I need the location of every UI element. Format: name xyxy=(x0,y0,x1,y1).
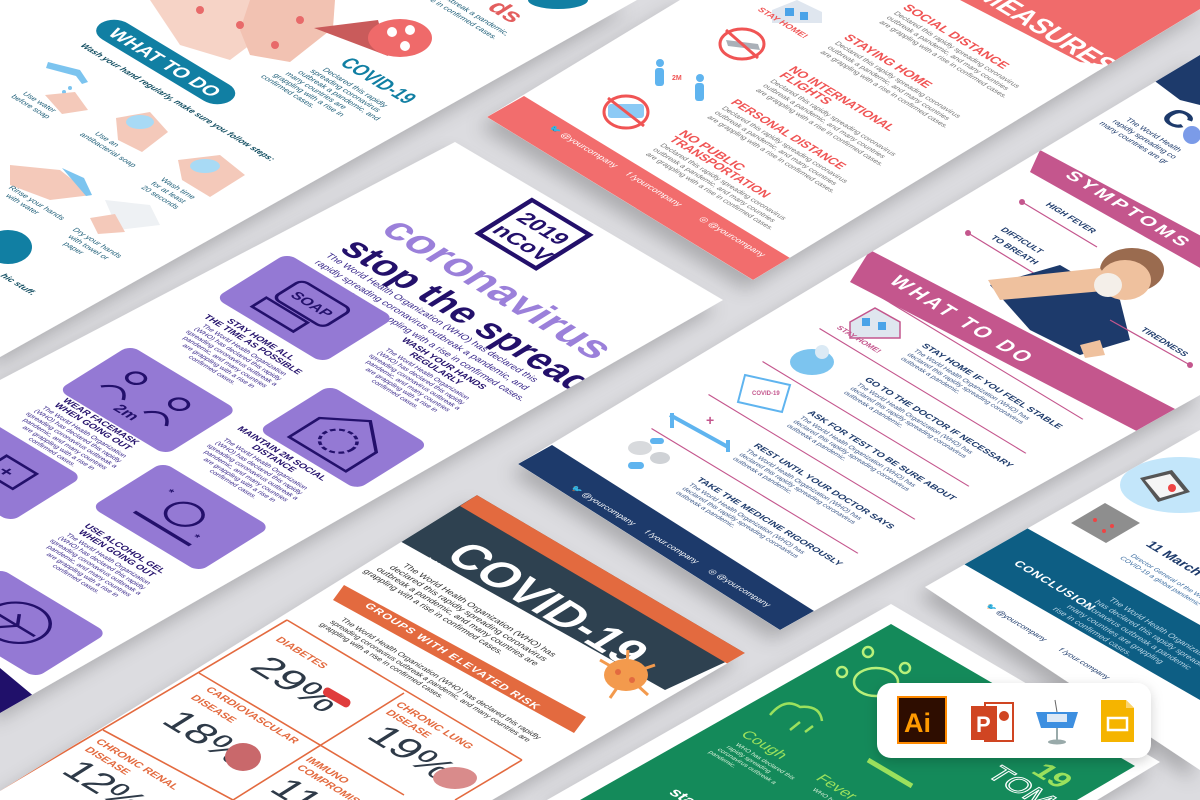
icon: bed: + xyxy=(706,412,714,428)
icon: clipboard covid xyxy=(738,375,790,412)
item: stay home if you feel stable xyxy=(834,294,1083,446)
item: take the medicine: TAKE THE MEDICINE RIGOROUSLY xyxy=(694,476,845,567)
band: conclusion teal: coronavirus outbreak a pandemic xyxy=(1078,601,1194,671)
text: wear facemask: spreading coronavirus outbreak a xyxy=(24,411,119,469)
illustration: coughing person xyxy=(988,248,1164,358)
text: stay home all the time xyxy=(161,308,313,401)
band: conclusion teal xyxy=(962,527,1200,700)
item: staying home: outbreak a pandemic, and many countries xyxy=(825,44,953,122)
band: conclusion teal: many countries are grappling xyxy=(1064,604,1166,665)
icon: clipboard covid: COVID-19 xyxy=(752,391,780,397)
text: wash your hands: spreading coronavirus outbreak a xyxy=(367,353,462,411)
item: ask for test: declared this rapidly spreading coronavirus xyxy=(791,419,911,492)
card: soap xyxy=(215,253,394,363)
item: social distance: Declared this rapidly spreading coronavirus xyxy=(892,10,1023,89)
text: intro paragraph: The World Health Organization (WHO) has declared this xyxy=(323,252,541,384)
text: wear facemask: The World Health Organization xyxy=(40,406,128,459)
text: covid intro xyxy=(361,553,560,673)
icon: soapy hands xyxy=(116,112,168,152)
item: staying home: Declared this rapidly spreading coronavirus xyxy=(833,40,964,119)
panel: hand washing xyxy=(0,0,637,357)
footer: navy corner xyxy=(0,668,32,713)
text: alcohol gel: spreading coronavirus outbreak a xyxy=(48,538,143,596)
text: symptoms intro xyxy=(1097,110,1187,165)
footer: navy: f /your.company xyxy=(642,529,702,565)
item: take the medicine: declared this rapidly spreading coronavirus xyxy=(680,486,800,559)
card: no flights xyxy=(0,568,108,678)
item: rest until doctor says: declared this rapidly spreading coronavirus xyxy=(737,452,857,525)
icon: keynote xyxy=(1036,700,1078,744)
title: 19 symptoms: 19 xyxy=(1024,759,1079,793)
text: covid description xyxy=(261,68,388,120)
icon: 2m people: 2M xyxy=(672,75,682,82)
icon: no bus xyxy=(604,96,648,128)
text: intro paragraph: many countries are grappling with a rise in confirmed cases. xyxy=(300,265,528,403)
text: groups intro: spreading coronavirus outbreak a pandemic, and many countries are xyxy=(328,619,533,743)
text: wash time: Wash time xyxy=(158,176,198,200)
item: take the medicine: outbreak a pandemic. xyxy=(674,490,737,529)
item: take the medicine xyxy=(609,428,859,580)
icon: blue virus xyxy=(1183,126,1200,144)
panel: coral measures xyxy=(487,0,1200,280)
item: no international flights: outbreak a pandemic, and many countries xyxy=(761,82,888,160)
text: stay home all the time: THE TIME AS POSSIBLE xyxy=(201,313,305,376)
label: cough: rapidly spreading xyxy=(724,745,773,774)
text: stay home all the time: are grappling with a rise in xyxy=(180,343,256,389)
text: symptoms intro: The World Health xyxy=(1123,116,1184,153)
text: covid description: Declared this rapidly xyxy=(320,66,390,109)
stat: chronic lung 19%: 19% xyxy=(358,720,466,786)
badge: 2019 nCoV: nCoV xyxy=(487,221,559,265)
icon: illustrator xyxy=(898,697,946,743)
item: stay home if you feel stable: declared this rapidly spreading coronavirus xyxy=(905,352,1025,425)
band: groups with elevated risk: GROUPS WITH ELEVATED RISK xyxy=(362,601,543,712)
icon: no flights xyxy=(720,29,764,59)
panel: green symptoms xyxy=(547,604,1160,800)
panel: covid underlying conditions xyxy=(0,495,745,800)
text: covid intro: grappling with a rise in confirmed cases. xyxy=(361,568,507,656)
card: soap: SOAP xyxy=(286,290,336,320)
text: symptoms intro: many countries are gr xyxy=(1097,120,1171,165)
card: alcohol gel: * xyxy=(188,533,203,542)
table: grid lines xyxy=(0,620,522,800)
text: maintain 2m: spreading coronavirus outbreak a xyxy=(205,443,300,501)
text: alcohol gel: USE ALCOHOL GEL xyxy=(82,522,168,575)
text: wash your hands: WASH YOUR HANDS xyxy=(399,336,489,391)
item: stay home if you feel stable: The World Health Organization (WHO) has xyxy=(911,348,1032,421)
icon: powerpoint xyxy=(971,703,1013,741)
item: go to the doctor: declared this rapidly spreading coronavirus xyxy=(848,386,968,459)
text: wash your hands: are grappling with a rise in xyxy=(363,367,439,413)
label: cough: coronavirus outbreak a xyxy=(715,747,778,786)
text: rinse: with water xyxy=(3,192,42,216)
icon: rinse hands xyxy=(10,165,92,200)
text: stay home all the time: STAY HOME ALL xyxy=(225,317,298,362)
card: facemask xyxy=(0,412,82,522)
heading: COVID-19: COVID-19 xyxy=(335,54,422,107)
footer: navy: 🐦 @yourcompany xyxy=(568,484,639,527)
label: cough xyxy=(706,728,797,793)
text: covid intro: The World Health Organization (WHO) has xyxy=(400,562,560,658)
text: stay home all the time: confirmed cases. xyxy=(186,355,238,386)
card: 2m distance xyxy=(58,345,238,455)
item: no public transportation: TRANSPORTATION xyxy=(666,134,774,200)
footer: navy: ◎ @yourcompany xyxy=(706,568,774,609)
text: wash your hands: The World Health Organization xyxy=(383,348,471,401)
card: alcohol gel xyxy=(91,462,270,572)
item: take the medicine: The World Health Organization (WHO) has xyxy=(686,482,807,555)
item: personal distance: Declared this rapidly spreading coronavirus xyxy=(720,105,851,184)
panel: conclusion xyxy=(925,430,1200,770)
item: staying home: STAYING HOME xyxy=(841,32,935,90)
text: wash time: 20 seconds xyxy=(139,184,182,210)
stat: chronic renal 12%: CHRONIC RENAL xyxy=(93,737,182,792)
text: maintain 2m: are grappling with a rise in xyxy=(201,457,277,503)
icon: stay home house: STAY HOME! xyxy=(755,6,811,40)
panel: pink what to do xyxy=(518,40,1200,630)
card: 2m distance: 2m xyxy=(109,402,143,423)
icon: monitor xyxy=(1140,470,1190,502)
item: stay home if you feel stable: outbreak a pandemic. xyxy=(899,356,962,395)
item: go to the doctor xyxy=(777,328,1029,482)
stat: diabetes 29%: 29% xyxy=(241,651,352,718)
item: no international flights: FLIGHTS xyxy=(776,70,835,106)
card: house xyxy=(258,385,429,490)
text: wear facemask: are grappling with a rise in xyxy=(20,425,96,471)
text: covid description: spreading coronavirus xyxy=(308,68,383,113)
text: covid description: many countries are xyxy=(283,71,349,110)
label: high fever: HIGH FEVER xyxy=(1043,201,1099,235)
item: ask for test xyxy=(720,362,973,515)
text: dry hands: paper xyxy=(61,241,87,256)
item: personal distance: outbreak a pandemic, and many countries xyxy=(712,109,840,187)
icon: doctor xyxy=(790,345,834,375)
item: social distance: outbreak a pandemic, and many countries xyxy=(884,14,1012,92)
item: ask for test: outbreak a pandemic. xyxy=(785,423,848,462)
text: wash time: for at least xyxy=(149,180,189,205)
icon: bed xyxy=(670,412,728,452)
item: social distance: are grappling with a rise in confirmed cases. xyxy=(877,19,1010,99)
badge: 2019 nCoV: 2019 xyxy=(511,209,575,248)
header: dark slate xyxy=(398,495,745,690)
stat: cardiovascular 18% xyxy=(153,685,302,771)
label: tiredness: TIREDNESS xyxy=(1138,326,1191,358)
text: covid intro: outbreak a pandemic, and many countries are xyxy=(374,566,541,667)
icon: teal circle xyxy=(528,0,588,9)
text: wash your hands: (WHO) has declared this rapidly xyxy=(375,351,466,406)
item: rest until doctor says xyxy=(666,394,915,546)
item: no public transportation: outbreak a pandemic, and many countries xyxy=(651,146,778,224)
text: alcohol gel: The World Health Organization xyxy=(64,533,152,586)
label: cough: WHO has declared this xyxy=(733,742,797,781)
stat: immunocompromised xyxy=(261,755,376,800)
band: what to do xyxy=(850,250,1200,490)
footer: coral xyxy=(487,96,790,280)
stat: cardiovascular 18%: DISEASE xyxy=(188,693,239,725)
text: maintain 2m xyxy=(185,424,331,513)
band: conclusion teal: CONCLUSION xyxy=(1011,559,1099,613)
pill: partial teal xyxy=(0,230,32,264)
title: COVID-19: COVID-19 xyxy=(434,535,661,673)
pill: what to do: WHAT TO DO xyxy=(103,26,226,100)
icon: google slides xyxy=(1101,700,1134,742)
header: orange stripe xyxy=(460,495,745,664)
text: wear facemask: WEAR FACEMASK xyxy=(60,397,142,446)
icon: stay home: STAY HOME! xyxy=(834,324,884,354)
text: antibacterial soap: antibacterial soap xyxy=(77,131,139,168)
band: what to do: WHAT TO DO xyxy=(884,272,1041,368)
stat: chronic lung 19%: CHRONIC LUNG xyxy=(393,700,476,751)
icon: hands with virus xyxy=(150,0,335,62)
text: maintain 2m: DISTANCE xyxy=(249,443,299,473)
badge: 2019 nCoV xyxy=(478,200,590,268)
text: wear facemask: confirmed cases. xyxy=(26,437,78,468)
footer: coral: ◎ @yourcompany xyxy=(697,215,769,259)
item: rest until doctor says: outbreak a pandemic. xyxy=(731,456,794,495)
item: rest until doctor says: The World Health Organization (WHO) has xyxy=(743,448,864,521)
text: antibacterial soap: Use an xyxy=(92,130,122,148)
text: covid description: grappling with a rise in xyxy=(271,72,347,118)
stat: cardiovascular 18%: CARDIOVASCULAR xyxy=(203,685,302,746)
text: covid description: outbreak a pandemic, and xyxy=(296,69,382,122)
text: symptoms intro: rapidly spreading co xyxy=(1110,118,1179,160)
item: no public transportation: are grappling with a rise in confirmed cases. xyxy=(644,151,777,231)
stat: chronic lung 19% xyxy=(358,700,477,789)
band: symptoms: SYMPTOMS xyxy=(1061,168,1198,251)
footer: coral: 🐦 @yourcompany xyxy=(546,124,621,169)
icon: globe with germs xyxy=(837,647,910,696)
footer: navy xyxy=(518,445,814,630)
card: alcohol gel: * xyxy=(162,487,177,497)
title: coronavirus: coronavirus xyxy=(371,212,625,366)
stat: immunocompromised: IMMUNO xyxy=(303,755,352,785)
text: dry hands: Dry your hands xyxy=(70,226,124,259)
item: no international flights: are grappling with a rise in confirmed cases. xyxy=(754,87,887,167)
stat: chronic renal 12%: DISEASE xyxy=(82,745,133,777)
text: wash your hands: REGULARLY xyxy=(407,351,466,387)
text: rinse: Rinse your hands xyxy=(6,184,67,221)
item: staying home: are grappling with a rise in confirmed cases. xyxy=(818,49,951,129)
icon: 2m people xyxy=(655,59,704,101)
text: alcohol gel: confirmed cases. xyxy=(50,564,102,595)
footer: social links xyxy=(983,602,1112,681)
label: cough: Cough xyxy=(737,728,791,762)
text: alcohol gel: pandemic, and many countries xyxy=(45,545,133,598)
header: navy top xyxy=(1140,40,1200,110)
text: stay home all the time: (WHO) has declared this rapidly xyxy=(192,327,283,382)
label: cough: pandemic. xyxy=(706,750,738,769)
text: maintain 2m: The World Health Organization xyxy=(221,438,309,491)
text: wear facemask: WHEN GOING OUT xyxy=(52,402,134,452)
text: wear facemask: (WHO) has declared this rapidly xyxy=(32,409,123,464)
stat: diabetes 29%: DIABETES xyxy=(273,635,330,670)
icon: pills xyxy=(628,438,670,469)
icon: powerpoint: P xyxy=(976,712,991,737)
icon: virus orange xyxy=(600,650,655,698)
icon: wash hands xyxy=(178,155,245,197)
text: alcohol gel: (WHO) has declared this rapidly xyxy=(56,536,147,591)
subtitle: underlying conditions: UNDERLYING CONDITIONS xyxy=(418,556,594,663)
title: stop the spread: stop the spread xyxy=(331,233,605,399)
text: wash your hands xyxy=(347,334,493,423)
text: use water: Use water xyxy=(20,90,59,114)
label: difficult to breath: TO BREATH xyxy=(988,234,1041,266)
label: difficult to breath xyxy=(965,226,1047,277)
item: no international flights: NO INTERNATIONAL xyxy=(786,64,899,133)
label: difficult to breath: DIFFICULT xyxy=(998,226,1047,255)
icon: illustrator: Ai xyxy=(904,708,931,738)
icon: epidemic map xyxy=(1071,503,1140,543)
text: stay home all the time: pandemic, and many countries xyxy=(181,336,269,389)
text: wear facemask xyxy=(4,392,150,481)
item: ask for test: ASK FOR TEST TO BE SURE ABOUT xyxy=(805,409,960,502)
icon: light blue blob xyxy=(1120,457,1200,513)
icon: lungs xyxy=(770,703,822,732)
text: maintain 2m: confirmed cases. xyxy=(207,469,259,500)
callout: software icons xyxy=(877,683,1151,758)
text: maintain 2m: (WHO) has declared this rapidly xyxy=(213,441,304,496)
icon: virus bubble xyxy=(314,19,432,57)
text: dry hands: with towel or xyxy=(65,233,112,261)
text: maintain 2m: MAINTAIN 2M SOCIAL xyxy=(235,425,329,482)
text: maintain 2m: pandemic, and many countries xyxy=(202,450,290,503)
stat: chronic lung 19%: DISEASE xyxy=(383,708,434,740)
panel: coronavirus stop the spread xyxy=(0,142,723,718)
text: wash your hands: confirmed cases. xyxy=(369,379,421,410)
item: rest until doctor says: REST UNTIL YOUR DOCTOR SAYS xyxy=(751,442,897,530)
icon: stay home xyxy=(834,308,900,354)
stat: chronic renal 12% xyxy=(53,737,182,800)
text: wash time xyxy=(141,177,194,209)
item: stay home if you feel stable: STAY HOME IF YOU FEEL STABLE xyxy=(919,342,1065,430)
banner: measures xyxy=(960,0,1200,78)
text: intro paragraph: rapidly spreading coronavirus outbreak a pandemic, and xyxy=(312,259,531,392)
text: stay home all the time: The World Health Organization xyxy=(200,324,288,377)
text: covid intro: declared this rapidly spreading coronavirus xyxy=(387,564,551,663)
footer: coral: f /yourcompany xyxy=(624,171,685,208)
icon: thermometer xyxy=(868,760,912,786)
footer: social links: 🐦 @yourcompany xyxy=(983,602,1049,643)
item: go to the doctor: GO TO THE DOCTOR IF NECESSARY xyxy=(862,376,1016,469)
label: high fever xyxy=(1019,199,1099,247)
item: personal distance: are grappling with a rise in confirmed cases. xyxy=(705,114,838,194)
text: alcohol gel xyxy=(28,519,174,608)
item: social distance: SOCIAL DISTANCE xyxy=(900,2,1012,71)
stat: cardiovascular 18%: 18% xyxy=(153,705,261,771)
text: wash your hands: pandemic, and many countries xyxy=(364,360,452,413)
item: go to the doctor: The World Health Organization (WHO) has xyxy=(854,382,975,455)
text: wear facemask: pandemic, and many countries xyxy=(21,418,109,471)
item: ask for test: The World Health Organization (WHO) has xyxy=(797,415,918,488)
item: go to the doctor: outbreak a pandemic. xyxy=(842,390,905,429)
text: alcohol gel: WHEN GOING OUT xyxy=(76,529,158,579)
band: conclusion teal: rise in confirmed cases. xyxy=(1051,606,1135,657)
text: groups intro: The World Health Organization (WHO) has declared this rapidly xyxy=(338,616,544,741)
text: groups intro: grappling with a rise in confirmed cases. xyxy=(317,621,447,700)
band: symptoms xyxy=(1030,150,1200,296)
icon: faucet water xyxy=(45,62,88,114)
item: no public transportation: Declared this rapidly spreading coronavirus xyxy=(658,142,789,221)
item: personal distance: PERSONAL DISTANCE xyxy=(728,97,849,171)
text: 11 March 2020: COVID-19 a global pandemic xyxy=(1118,556,1200,607)
label: tiredness xyxy=(1110,320,1193,368)
text: covid description: confirmed cases. xyxy=(259,73,318,109)
text: alcohol gel: are grappling with a rise in xyxy=(44,552,120,598)
text: stay home all the time: spreading coronavirus outbreak a xyxy=(184,329,279,387)
text: use water: before soap xyxy=(9,93,53,120)
item: no public transportation: NO PUBLIC xyxy=(676,128,748,173)
item: no international flights: Declared this rapidly spreading coronavirus xyxy=(768,78,899,157)
icon: towel xyxy=(90,200,160,234)
footer: social links: f /your.company xyxy=(1056,647,1112,681)
band: groups with elevated risk xyxy=(333,585,586,733)
text: wash subtitle: Wash your hand regularly, make sure you follow steps: xyxy=(78,42,278,163)
